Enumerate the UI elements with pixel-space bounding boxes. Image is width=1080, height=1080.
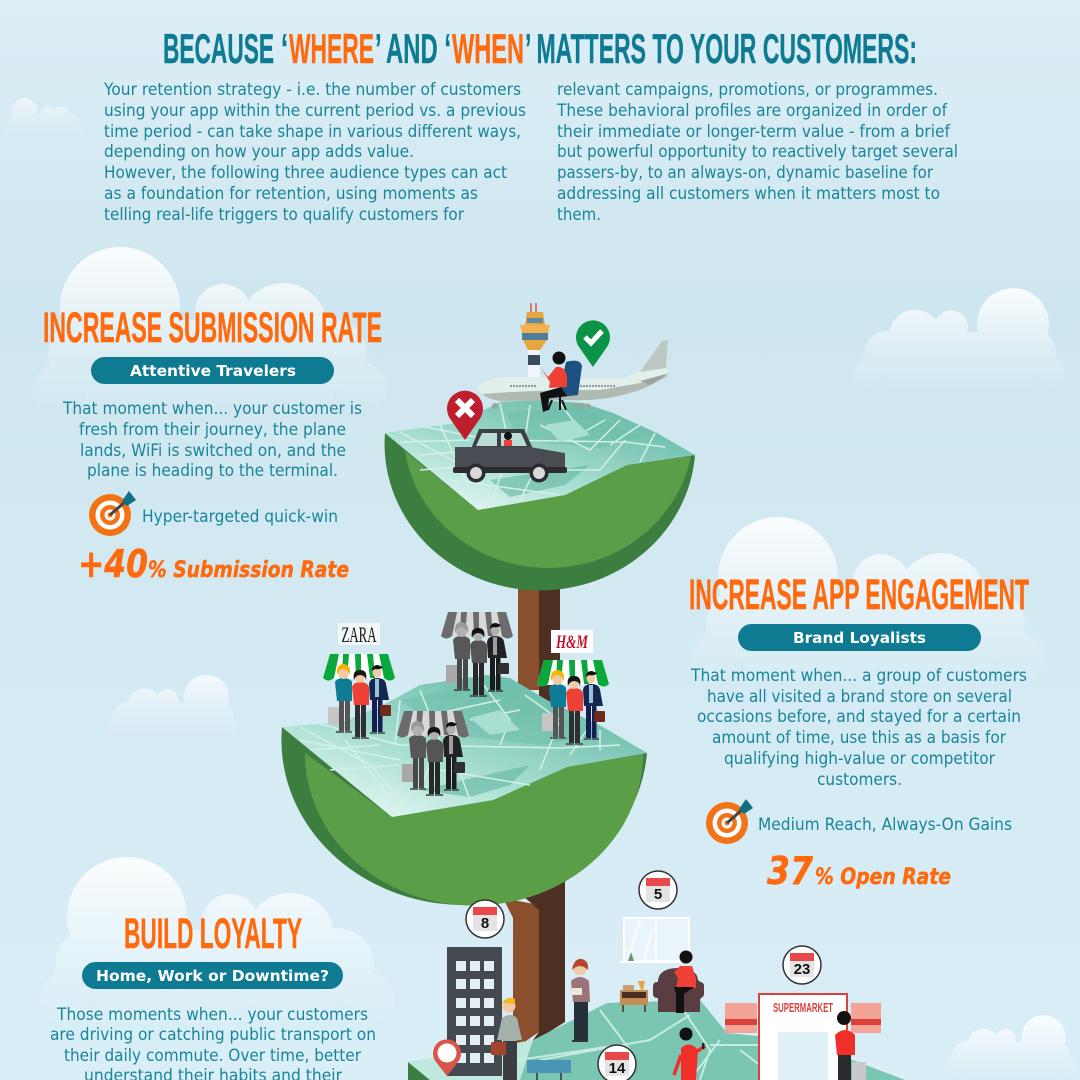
title: ‘ [281,25,288,72]
map surface [282,675,647,817]
hemisphere shadow [385,433,695,590]
store: gray upper [441,612,513,696]
text: attentive travelers moment: fresh from their journey, the plane [79,420,346,439]
stat: 37% open rate: % Open Rate [815,865,951,890]
cloud: large behind first heading [33,247,387,413]
pill: home, work or downtime: Home, Work or Downtime? [96,967,329,985]
hemisphere shadow [281,727,647,905]
calendar: 5 [639,871,677,909]
icon: location pin [433,1039,461,1076]
calendar: 14: 14 [609,1060,626,1077]
intro text: right column: their immediate or longer-term value - from a brief [557,122,951,141]
hemisphere [305,753,643,906]
cloud: behind third heading [40,857,394,1023]
store: Zara shoppers [323,654,395,738]
pill: attentive travelers [91,357,334,384]
bench [527,1060,571,1080]
title: BECAUSE [163,25,274,72]
intro text: left column: depending on how your app adds value. [104,142,414,161]
title: WHERE [289,25,374,72]
logo: H&M [551,630,593,653]
intro text: right column: These behavioral profiles are organized in order of [556,101,948,120]
stat: 37% open rate [767,849,951,893]
stat: 37% open rate: 37 [767,849,813,893]
text: medium reach: Medium Reach, Always-On Gains [758,815,1012,834]
pill: home, work or downtime [82,962,343,989]
hemisphere [405,451,691,568]
calendar: 14 [598,1045,636,1080]
person: blond man with briefcase [491,998,522,1080]
island 1: airport [385,400,695,590]
title: ’ AND ‘ [375,25,451,72]
map surface [385,400,695,510]
person: walking with phone [674,1028,705,1080]
intro text: left column: telling real-life triggers to qualify customers for [104,205,464,224]
intro text: left column: using your app within the current period vs. a previous [104,101,526,120]
stat: +40% submission rate: +40 [78,542,148,586]
cloud: mid left small [105,675,239,738]
building [447,947,502,1076]
text: brand loyalists moment: That moment when... a group of customers [690,666,1027,685]
icon: target 2 [706,799,753,844]
text: attentive travelers moment [62,399,362,480]
stat: +40% submission rate: % Submission Rate [148,558,349,583]
calendar: 5: 5 [654,886,662,903]
pill: attentive travelers: Attentive Travelers [130,362,296,380]
icon: control tower [520,303,550,377]
intro text: right column: but powerful opportunity to reactively target several [557,142,958,161]
tree trunk: lower [503,875,565,1050]
intro text: right column: them. [557,205,601,224]
text: brand loyalists moment [690,666,1027,789]
person: shopper at supermarket [835,1011,866,1080]
store: gray lower [397,711,469,795]
pill: brand loyalists [738,624,981,651]
intro text: left column: Your retention strategy - i.e. the number of customers [103,80,521,99]
island 2: stores [281,675,647,906]
calendar: 23: 23 [794,961,810,978]
cloud: behind second heading [691,517,1045,683]
heading: build loyalty: BUILD LOYALTY [124,910,302,958]
store: H&M shoppers [537,660,609,744]
text: daily commute moment: their daily commute. Over time, better [64,1046,361,1065]
text: attentive travelers moment: plane is heading to the terminal. [87,461,338,480]
person: standing woman reading [571,959,590,1041]
intro text: left column [103,80,526,224]
text: daily commute moment: are driving or catching public transport on [50,1025,376,1044]
window [620,918,692,962]
text: hyper-targeted: Hyper-targeted quick-win [142,507,338,526]
intro text: left column: as a foundation for retention, using moments as [104,184,478,203]
cloud: small upper left [5,98,83,135]
icon: seated traveler [540,352,582,412]
calendar: 23 [783,946,821,984]
text: brand loyalists moment: amount of time, use this as a basis for [712,728,1006,747]
text: attentive travelers moment: That moment when... your customer is [62,399,362,418]
title: WHEN [452,25,524,72]
tree trunk: upper [518,580,560,710]
logo: H&M: H&M [555,632,589,653]
intro text: right column [556,80,958,224]
icon: car with driver [453,429,567,482]
text: attentive travelers moment: lands, WiFi is switched on, and the [80,441,346,460]
heading: increase submission rate: INCREASE SUBMISSION RATE [43,304,382,352]
logo: Zara: ZARA [342,622,377,647]
island 3: daily life map [408,1000,905,1080]
title [163,25,917,72]
text: brand loyalists moment: customers. [817,770,902,789]
icon: green check pin [576,320,610,367]
stat: +40% submission rate [78,542,349,586]
text: brand loyalists moment: qualifying high-value or competitor [724,749,995,768]
logo: Zara [338,622,380,647]
cloud: lower right [945,1015,1076,1077]
text: brand loyalists moment: have all visited a brand store on several [707,687,1012,706]
intro text: left column: However, the following three audience types can act [104,163,507,182]
intro text: right column: passers-by, to an always-on, dynamic baseline for [557,163,933,182]
calendar: 8 [466,900,504,938]
text: brand loyalists moment: occasions before, and stayed for a certain [697,707,1021,726]
text: daily commute moment: Those moments when... your customers [56,1005,368,1024]
supermarket [725,994,881,1080]
intro text: left column: time period - can take shape in various different ways, [104,122,521,141]
text: daily commute moment [50,1005,376,1080]
calendar: 8: 8 [481,915,489,932]
person: on armchair [653,950,704,1013]
icon: airplane [477,340,670,409]
intro text: right column: addressing all customers when it matters most to [557,184,940,203]
supermarket: SUPERMARKET [773,1000,833,1015]
pill: brand loyalists: Brand Loyalists [793,629,926,647]
cloud: upper right [853,288,1065,388]
icon: red cross pin [447,391,483,440]
intro text: right column: relevant campaigns, promotions, or programmes. [557,80,938,99]
side table [620,981,648,1012]
icon: target 1 [89,491,136,536]
